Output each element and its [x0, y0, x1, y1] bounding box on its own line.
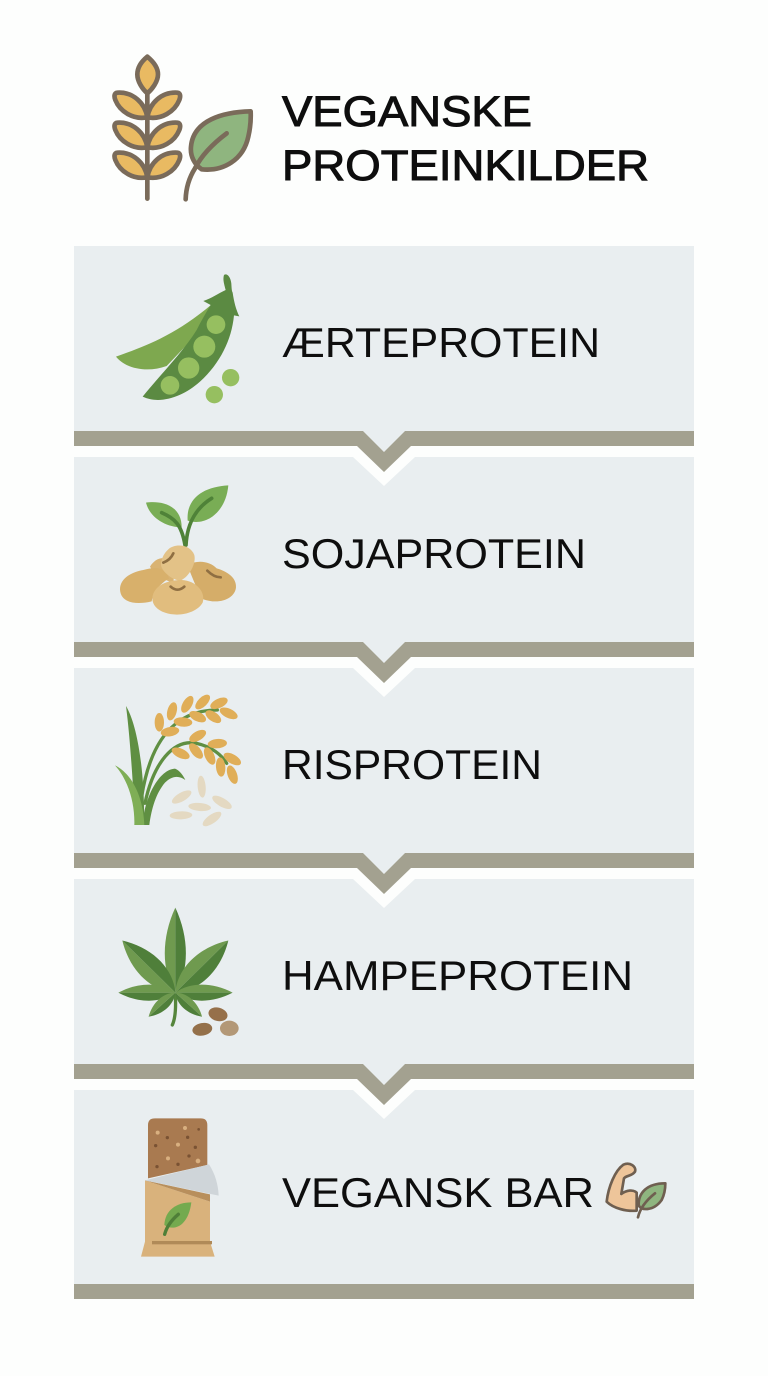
- label: risprotein: RISPROTEIN: [282, 741, 542, 788]
- icon: hemp leaf with seeds: [114, 908, 239, 1037]
- arrow: soja to ris: [74, 642, 694, 697]
- panel: hampeprotein background: [74, 879, 694, 1064]
- panel: ærteprotein background: [74, 246, 694, 431]
- label: sojaprotein: SOJAPROTEIN: [282, 530, 586, 577]
- panel: sojaprotein background: [74, 457, 694, 642]
- panel: vegansk bar background: [74, 1090, 694, 1284]
- icon: pea pod: [116, 274, 239, 403]
- title: PROTEINKILDER: [282, 142, 649, 190]
- icon: soybeans with sprout: [120, 485, 236, 615]
- icon: wheat and leaf: [114, 57, 251, 199]
- icon: protein bar in wrapper: [141, 1118, 219, 1257]
- arrow: hampe to bar: [74, 1064, 694, 1119]
- arrow: ærte to soja: [74, 431, 694, 486]
- panel: risprotein background: [74, 668, 694, 853]
- label: vegansk bar: VEGANSK BAR: [282, 1169, 594, 1216]
- icon: muscle arm and leaf: [607, 1164, 665, 1217]
- label: ærteprotein: ÆRTEPROTEIN: [282, 319, 600, 366]
- icon: rice plant with grains: [115, 692, 243, 829]
- title: VEGANSKE: [282, 88, 532, 136]
- bottom bar: [74, 1284, 694, 1299]
- title: [282, 88, 649, 190]
- label: hampeprotein: HAMPEPROTEIN: [282, 952, 633, 999]
- arrow: ris to hampe: [74, 853, 694, 908]
